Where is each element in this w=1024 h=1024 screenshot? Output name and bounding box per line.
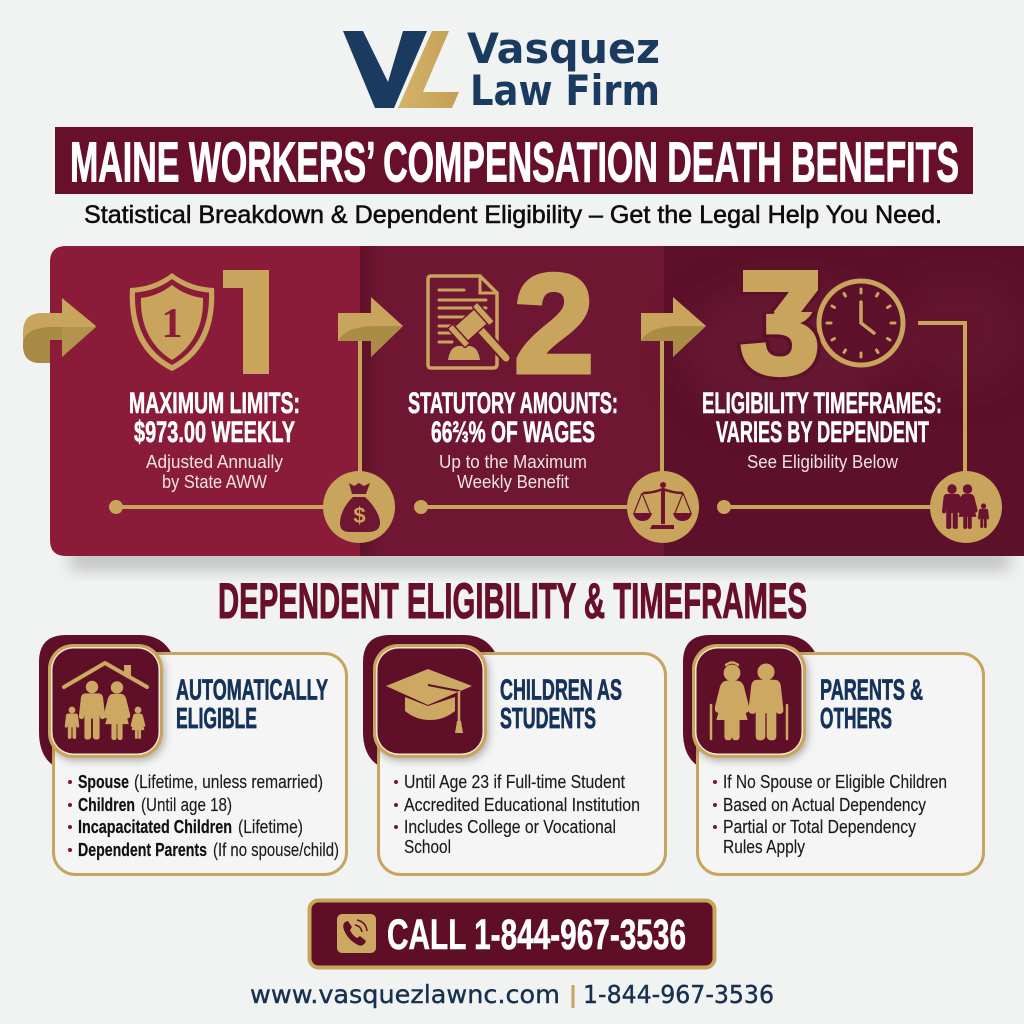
icon: family under roof xyxy=(48,644,163,758)
card list: Accredited Educational Institution xyxy=(404,794,640,815)
step 2 text: 66⅔% OF WAGES xyxy=(431,416,595,449)
step 1 text: by State AWW xyxy=(162,471,267,492)
step 1 text: $973.00 WEEKLY xyxy=(134,416,295,449)
card list: (Lifetime, unless remarried) xyxy=(134,771,323,792)
step 3 text: See Eligibility Below xyxy=(747,451,899,472)
card list: (Lifetime) xyxy=(238,816,303,837)
step 2 text: Up to the Maximum xyxy=(439,451,587,472)
logo mark: L xyxy=(398,31,459,108)
icon: family xyxy=(930,471,1002,543)
card list: Dependent Parents xyxy=(78,839,207,860)
card: parents and others xyxy=(683,635,984,874)
step 2 text: STATUTORY AMOUNTS: xyxy=(408,387,618,420)
footer contact line: www.vasquezlawnc.com xyxy=(250,980,560,1009)
panel shadow xyxy=(70,548,1010,570)
card frame xyxy=(378,654,666,874)
card list: Rules Apply xyxy=(723,836,806,857)
arrow 1 xyxy=(23,298,96,363)
card list: (If no spouse/child) xyxy=(213,839,339,860)
icon: clock xyxy=(819,281,903,365)
card list xyxy=(394,771,640,857)
big numeral 2: 2 xyxy=(514,245,594,402)
connector lines xyxy=(116,323,965,507)
big numeral 3: 3 xyxy=(740,246,820,403)
footer contact line xyxy=(250,980,774,1009)
icon: shield xyxy=(130,273,214,371)
card: children as students xyxy=(363,635,666,874)
icon: graduation cap xyxy=(373,644,487,758)
card list: School xyxy=(404,836,451,857)
step 2 text: Weekly Benefit xyxy=(457,471,569,492)
logo wordmark: Vasquez xyxy=(467,24,660,73)
icon: shield: 1 xyxy=(162,301,182,347)
logo wordmark xyxy=(467,24,660,115)
icon: scales of justice xyxy=(627,471,699,543)
big numeral 1: 1 xyxy=(205,242,286,405)
card: automatically eligible xyxy=(39,635,346,874)
card list: Children xyxy=(78,794,135,815)
step 2 text xyxy=(408,387,618,492)
icon: phone xyxy=(337,914,376,953)
card heading: STUDENTS xyxy=(500,703,596,735)
card frame xyxy=(54,654,346,874)
card frame xyxy=(698,654,984,874)
card tab xyxy=(683,635,816,766)
big numeral 3 xyxy=(736,270,821,380)
icon: money bag xyxy=(323,471,395,543)
card list xyxy=(68,771,339,860)
subtitle: Statistical Breakdown & Dependent Eligibility – Get the Legal Help You Need. xyxy=(84,201,942,229)
logo xyxy=(343,24,660,115)
card heading: AUTOMATICALLY xyxy=(176,674,328,706)
big numeral 1 xyxy=(223,270,269,374)
call to action button: CALL 1-844-967-3536 xyxy=(387,911,686,959)
card list: Incapacitated Children xyxy=(78,816,232,837)
card list: If No Spouse or Eligible Children xyxy=(723,771,947,792)
statistics panel xyxy=(23,242,1024,556)
step 1 text xyxy=(129,387,300,492)
card list: Partial or Total Dependency xyxy=(723,816,917,837)
card list: Until Age 23 if Full-time Student xyxy=(404,771,625,792)
card heading: ELIGIBLE xyxy=(176,703,257,735)
card list: Based on Actual Dependency xyxy=(723,794,927,815)
step 3 text xyxy=(702,387,942,472)
card heading xyxy=(500,674,622,735)
card list: (Until age 18) xyxy=(141,794,232,815)
card heading: OTHERS xyxy=(820,703,892,735)
card heading: PARENTS & xyxy=(820,674,923,706)
icon: elderly couple xyxy=(692,644,806,758)
card tab xyxy=(39,635,172,766)
arrow 2 xyxy=(338,297,403,357)
card heading xyxy=(820,674,923,735)
call to action button xyxy=(310,900,714,968)
logo wordmark: Law Firm xyxy=(470,66,660,115)
icon: money bag: $ xyxy=(353,503,366,528)
panel backgrounds xyxy=(50,246,1024,556)
step 1 text: Adjusted Annually xyxy=(146,451,284,472)
step 1 text: MAXIMUM LIMITS: xyxy=(129,387,300,420)
card list: Includes College or Vocational xyxy=(404,816,616,837)
card list xyxy=(713,771,947,857)
footer contact line: 1-844-967-3536 xyxy=(583,980,774,1009)
card list: Spouse xyxy=(78,771,129,792)
card heading xyxy=(176,674,328,735)
card heading: CHILDREN AS xyxy=(500,674,622,706)
arrow 3 xyxy=(641,297,706,357)
logo mark: V xyxy=(343,31,427,108)
icon: document and gavel xyxy=(428,276,506,368)
card tab xyxy=(363,635,496,766)
big numeral 3: 3 xyxy=(740,246,820,403)
